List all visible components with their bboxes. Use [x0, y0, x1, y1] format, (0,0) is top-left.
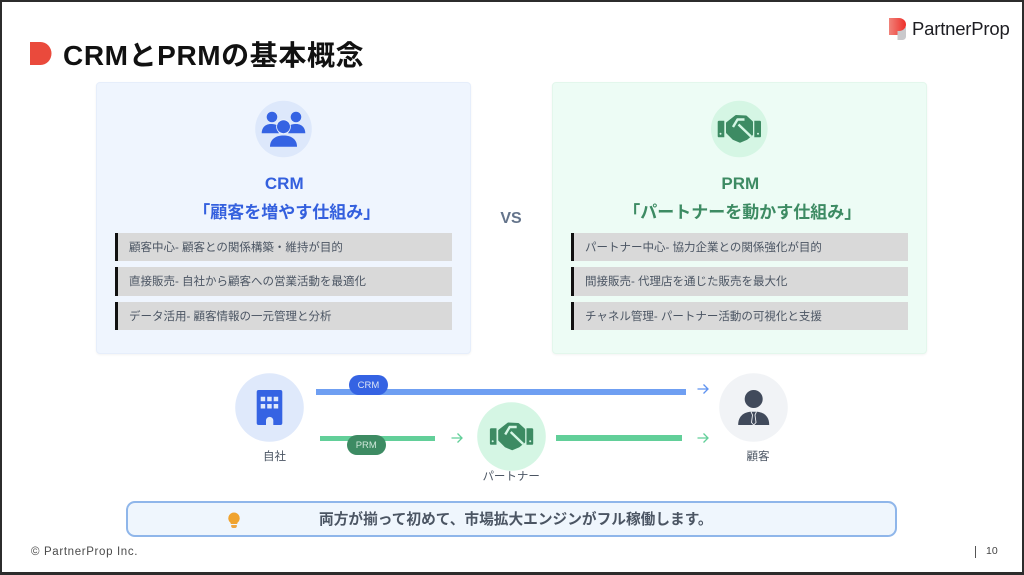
- title: CRMとPRMの基本概念: [63, 40, 364, 71]
- crm arrow: [698, 384, 709, 394]
- heading: PRM tagline: 「パートナーを動かす仕組み」: [623, 203, 861, 222]
- node: customer: [720, 374, 788, 463]
- vs label: VS: [500, 210, 522, 227]
- prm pill: [347, 435, 386, 455]
- heading: CRM tagline: 「顧客を増やす仕組み」: [193, 203, 380, 222]
- crm line: [316, 389, 686, 395]
- callout: [126, 501, 897, 537]
- crm pill: [349, 374, 388, 394]
- icon: light bulb: [228, 512, 240, 528]
- list: CRM items: [115, 233, 452, 330]
- footer: page number: [975, 546, 999, 558]
- icon: handshake: [711, 100, 768, 158]
- label: 自社: [263, 451, 286, 463]
- node: own company: [235, 373, 304, 463]
- item 1: パートナー中心- 協力企業との関係強化が目的: [585, 242, 822, 254]
- prm line 2: [556, 435, 682, 441]
- crm pill: CRM: [358, 380, 379, 390]
- item 3: [571, 302, 908, 330]
- item 2: 直接販売- 自社から顧客への営業活動を最適化: [129, 276, 366, 288]
- item 3: [115, 302, 452, 330]
- item 2: [571, 267, 908, 296]
- prm line 1: [320, 436, 435, 441]
- title icon: [30, 42, 52, 65]
- item 1: [571, 232, 908, 261]
- prm arrow 2: [698, 433, 709, 443]
- icon: businessperson: [720, 374, 788, 442]
- prm pill: PRM: [356, 440, 377, 451]
- heading: CRM: CRM: [265, 174, 304, 193]
- prm arrow 1: [452, 433, 463, 443]
- label: 顧客: [746, 451, 770, 463]
- icon: building: [235, 373, 304, 442]
- icon: handshake: [477, 402, 546, 471]
- footer: page number: 10: [986, 545, 998, 557]
- panel: PRM: [552, 82, 926, 354]
- item 2: 間接販売- 代理店を通じた販売を最大化: [585, 276, 788, 288]
- item 1: 顧客中心- 顧客との関係構築・維持が目的: [129, 242, 343, 254]
- item 3: チャネル管理- パートナー活動の可視化と支援: [585, 310, 822, 322]
- flow diagram: [235, 373, 788, 482]
- item 3: データ活用- 顧客情報の一元管理と分析: [129, 310, 332, 322]
- heading: PRM: PRM: [721, 174, 759, 193]
- item 2: [115, 267, 452, 296]
- node: partner: [477, 402, 546, 482]
- label: パートナー: [482, 470, 540, 482]
- logo: PartnerProp: PartnerProp: [912, 18, 1010, 39]
- icon: people: [255, 101, 312, 157]
- panel: CRM: [96, 82, 470, 354]
- callout text: 両方が揃って初めて、市場拡大エンジンがフル稼働します。: [319, 512, 713, 528]
- item 1: [115, 232, 452, 261]
- footer: copyright: © PartnerProp Inc.: [31, 546, 138, 558]
- list: PRM items: [571, 233, 908, 330]
